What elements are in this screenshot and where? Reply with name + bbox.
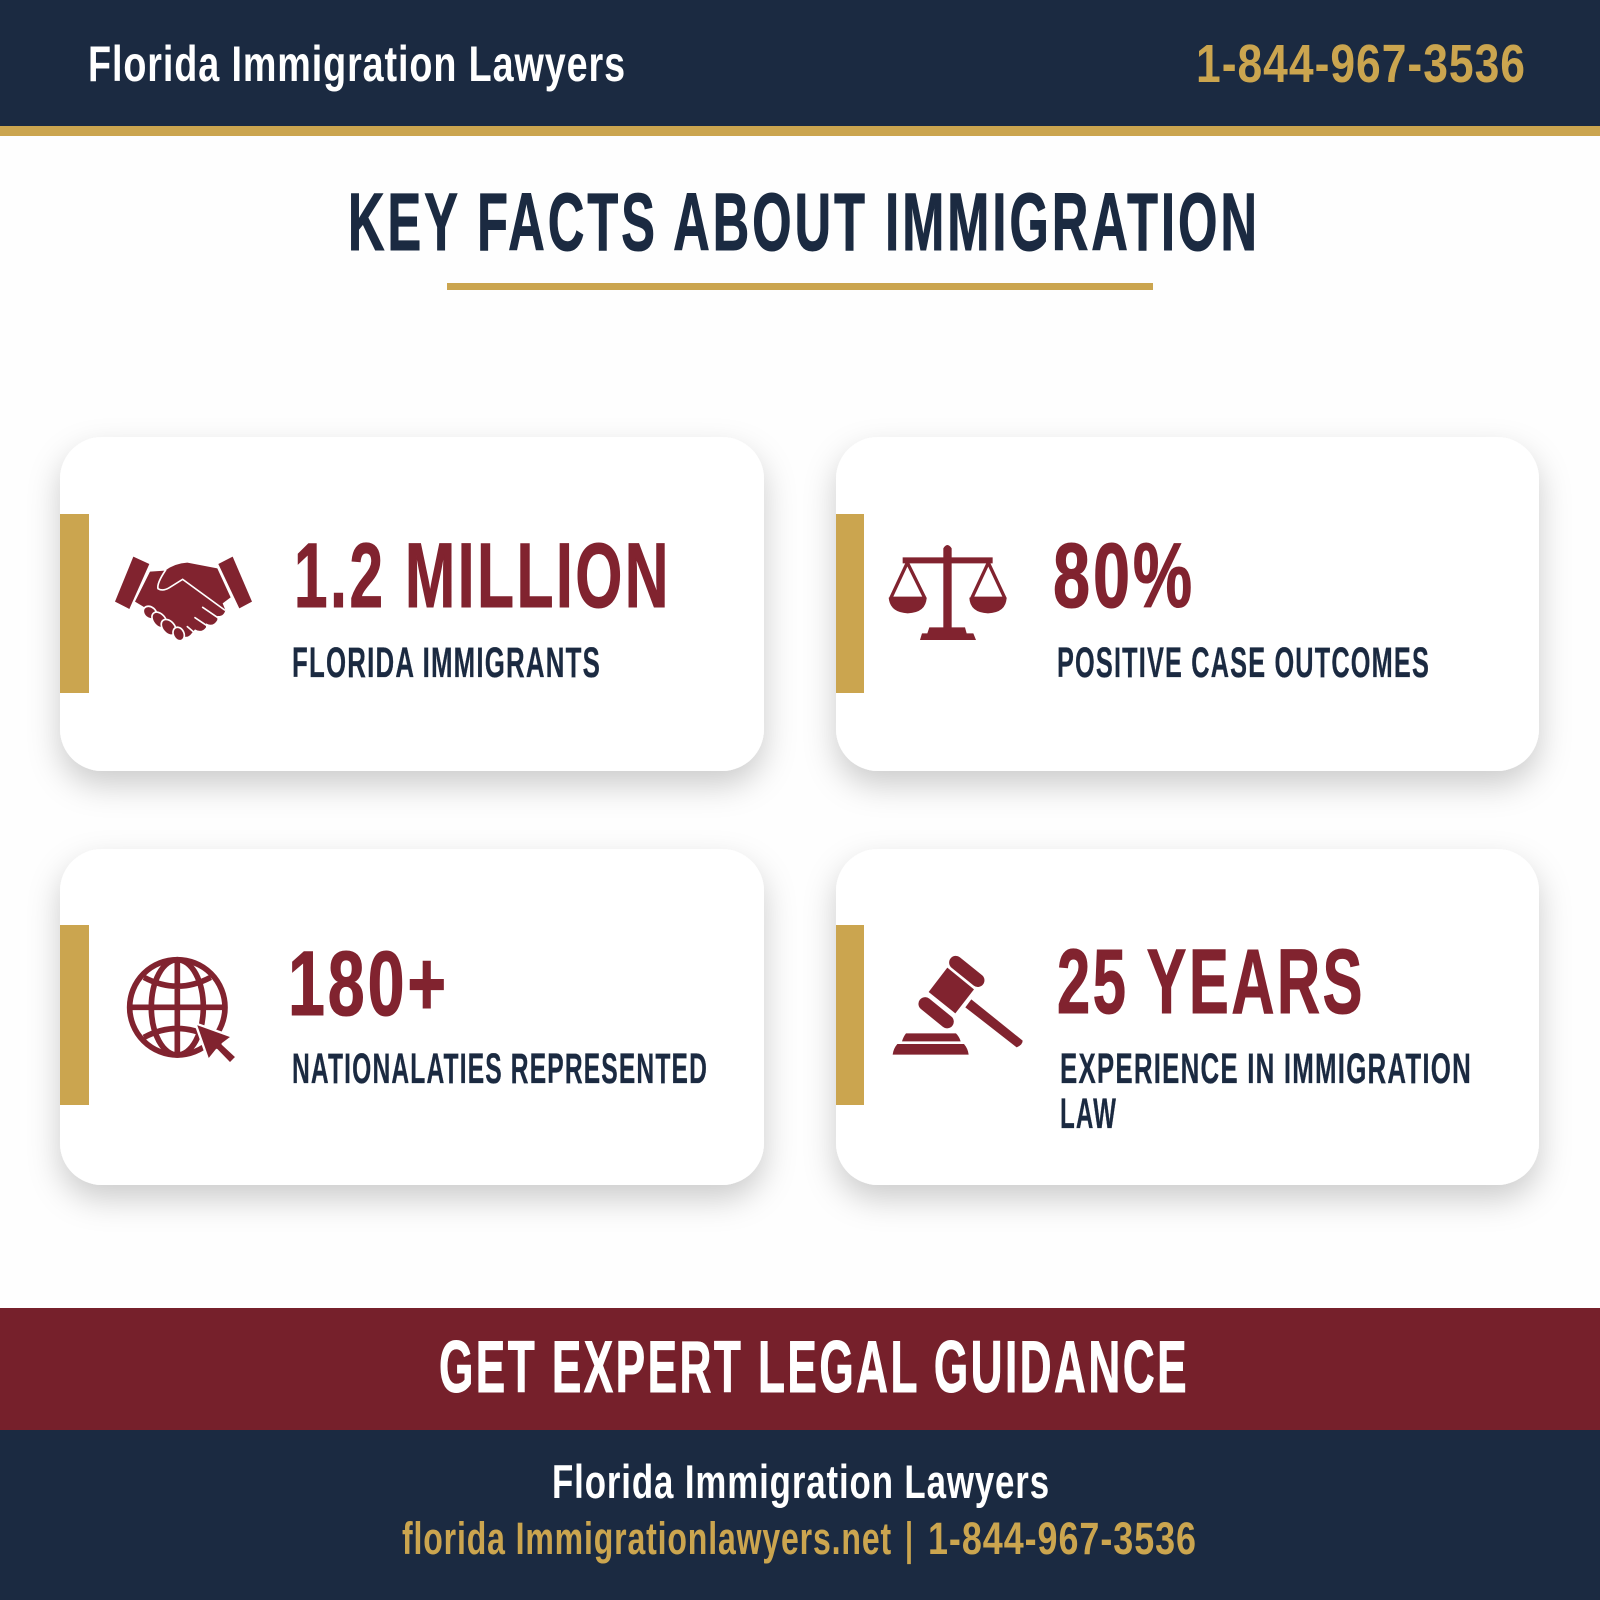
label: experience in immigration law: LAW (1060, 1090, 1117, 1138)
label: nationalities represented: NATIONALATIES REPRESENTED (292, 1045, 708, 1093)
footer (0, 1430, 1600, 1600)
panel: years of experience (836, 849, 1539, 1185)
stat: 80%: 80% (1053, 525, 1195, 627)
footer firm name: Florida Immigration Lawyers (552, 1455, 1050, 1508)
label: Florida immigrants: FLORIDA IMMIGRANTS (292, 639, 601, 687)
header phone number: 1-844-967-3536 (1196, 34, 1526, 94)
icon: handshake (115, 557, 252, 643)
footer contact line: | (905, 1513, 913, 1565)
icon: globe with cursor (130, 959, 237, 1064)
footer contact line: florida Immigrationlawyers.net (402, 1513, 892, 1564)
icon: gavel (893, 953, 1023, 1055)
header firm name: Florida Immigration Lawyers (88, 36, 626, 92)
stat: 180+: 180+ (288, 933, 449, 1035)
icon: scales of justice (889, 545, 1007, 640)
footer contact line: 1-844-967-3536 (928, 1513, 1197, 1564)
stat: 1.2 million: 1.2 MILLION (294, 525, 671, 627)
panel: positive case outcomes (836, 437, 1539, 771)
title (348, 177, 1260, 290)
call to action banner (0, 1308, 1600, 1430)
header bar (0, 0, 1600, 136)
panel: nationalities (60, 849, 764, 1185)
panel: Florida immigrants (60, 437, 764, 771)
stat: 25 years: 25 YEARS (1057, 931, 1365, 1033)
label: experience in immigration law (1060, 1045, 1472, 1138)
